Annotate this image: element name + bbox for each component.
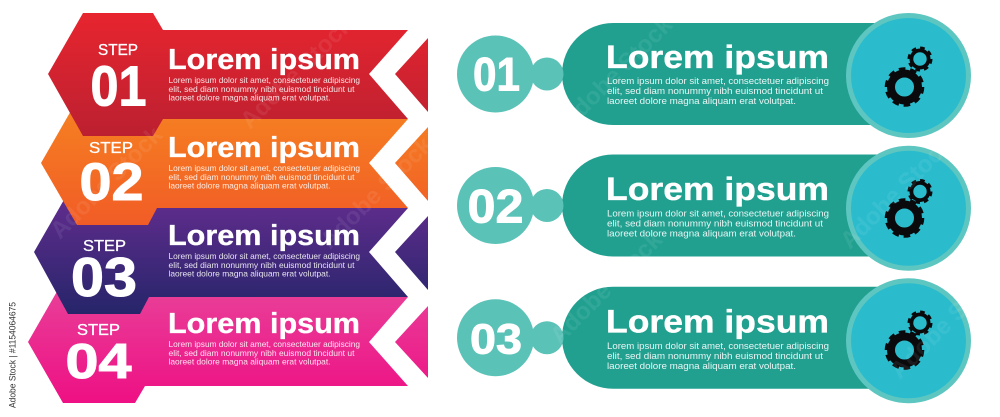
step number 02: 02 — [80, 153, 144, 212]
body text 02 — [168, 163, 360, 190]
body text 01: elit, sed diam nonummy nibh euismod tincidunt ut — [168, 84, 355, 94]
connector dot 01 — [530, 58, 564, 90]
orange arrow band — [41, 102, 408, 225]
panel: item 03 — [457, 281, 968, 401]
body text 01: laoreet dolore magna aliquam erat volutpat. — [168, 92, 330, 102]
number circle 01 — [457, 36, 534, 112]
body text item 02: elit, sed diam nonummy nibh euismod tincidunt ut — [607, 218, 823, 228]
panel: step 04 — [28, 281, 428, 403]
red chevron — [395, 38, 428, 112]
body text 01: Lorem ipsum dolor sit amet, consectetuer adipiscing — [168, 75, 360, 85]
icon circle 02 — [848, 148, 968, 268]
stock watermarks: Adobe Stock — [235, 11, 358, 134]
panel: step 03 — [34, 191, 428, 314]
heading 04: Lorem ipsum — [168, 308, 360, 340]
body text 03: laoreet dolore magna aliquam erat volutpat. — [168, 268, 330, 278]
stock watermarks: Adobe Stock — [555, 11, 678, 134]
step number 04: 04 — [66, 335, 132, 389]
panel: item 01 — [457, 16, 968, 136]
heading 03: Lorem ipsum — [168, 220, 360, 252]
body text 04 — [168, 339, 360, 366]
panel: item 02 — [457, 148, 968, 268]
body text item 01 — [607, 75, 829, 106]
body text item 03 — [607, 340, 829, 371]
connector dot 02 — [530, 189, 564, 222]
purple chevron — [395, 216, 428, 290]
body text item 03: elit, sed diam nonummy nibh euismod tincidunt ut — [607, 350, 823, 361]
number circle 02 — [457, 167, 534, 244]
body text item 02: Lorem ipsum dolor sit amet, consectetuer adipiscing — [607, 208, 829, 218]
step number 03: 03 — [71, 246, 137, 308]
body text item 01: Lorem ipsum dolor sit amet, consectetuer adipiscing — [607, 75, 829, 86]
stock watermarks: Adobe Stock — [835, 131, 958, 254]
stock watermarks: Adobe Stock — [545, 226, 668, 349]
heading item 03: Lorem ipsum — [606, 304, 829, 340]
body text item 03: Lorem ipsum dolor sit amet, consectetuer adipiscing — [607, 340, 829, 351]
body text 03: Lorem ipsum dolor sit amet, consectetuer adipiscing — [168, 251, 360, 261]
pink chevron — [395, 306, 428, 378]
step label 04: STEP — [77, 322, 120, 339]
heading 02: Lorem ipsum — [168, 132, 360, 164]
icon circle 03 — [848, 281, 968, 401]
icon: gears 02 — [886, 180, 931, 236]
step label 03: STEP — [83, 238, 126, 255]
body text item 01: elit, sed diam nonummy nibh euismod tincidunt ut — [607, 85, 823, 96]
body text 04: elit, sed diam nonummy nibh euismod tincidunt ut — [168, 348, 355, 358]
body text item 03: laoreet dolore magna aliquam erat volutpat. — [607, 360, 796, 371]
orange chevron — [395, 127, 428, 201]
number 03: 03 — [470, 316, 522, 364]
body text 04: Lorem ipsum dolor sit amet, consectetuer adipiscing — [168, 339, 360, 349]
teal pill — [562, 287, 900, 389]
icon: gears 03 — [886, 312, 931, 368]
body text 03 — [168, 251, 360, 278]
body text 02: Lorem ipsum dolor sit amet, consectetuer adipiscing — [168, 163, 360, 173]
teal pill — [562, 154, 900, 256]
body text item 01: laoreet dolore magna aliquam erat volutpat. — [607, 95, 796, 106]
number 02: 02 — [468, 180, 524, 232]
body text item 02 — [607, 208, 829, 238]
stock watermarks: Adobe Stock — [45, 121, 168, 244]
body text 02: laoreet dolore magna aliquam erat volutpat. — [168, 180, 330, 190]
heading item 02: Lorem ipsum — [606, 171, 829, 207]
stock id caption: Adobe Stock | #1154064675 — [8, 302, 18, 408]
step number 01: 01 — [90, 54, 146, 118]
body text 04: laoreet dolore magna aliquam erat volutpat. — [168, 356, 330, 366]
pink arrow band — [28, 281, 408, 403]
number circle 03 — [457, 299, 534, 376]
purple arrow band — [34, 191, 408, 314]
body text 02: elit, sed diam nonummy nibh euismod tincidunt ut — [168, 172, 355, 182]
body text item 02: laoreet dolore magna aliquam erat volutpat. — [607, 228, 796, 238]
icon circle 01 — [848, 16, 968, 136]
red arrow band — [48, 13, 408, 136]
stock watermarks: Adobe Stock — [315, 131, 438, 254]
connector dot 03 — [530, 321, 564, 354]
heading 01: Lorem ipsum — [168, 44, 360, 76]
body text 03: elit, sed diam nonummy nibh euismod tincidunt ut — [168, 260, 355, 270]
step label 02: STEP — [89, 140, 133, 157]
body text 01 — [168, 75, 360, 102]
icon: gears 01 — [886, 48, 931, 105]
panel: step 01 — [48, 13, 428, 136]
panel: step 02 — [41, 102, 428, 225]
heading item 01: Lorem ipsum — [606, 39, 829, 75]
step label 01: STEP — [98, 42, 138, 59]
teal pill — [562, 23, 900, 125]
number 01: 01 — [473, 48, 520, 100]
